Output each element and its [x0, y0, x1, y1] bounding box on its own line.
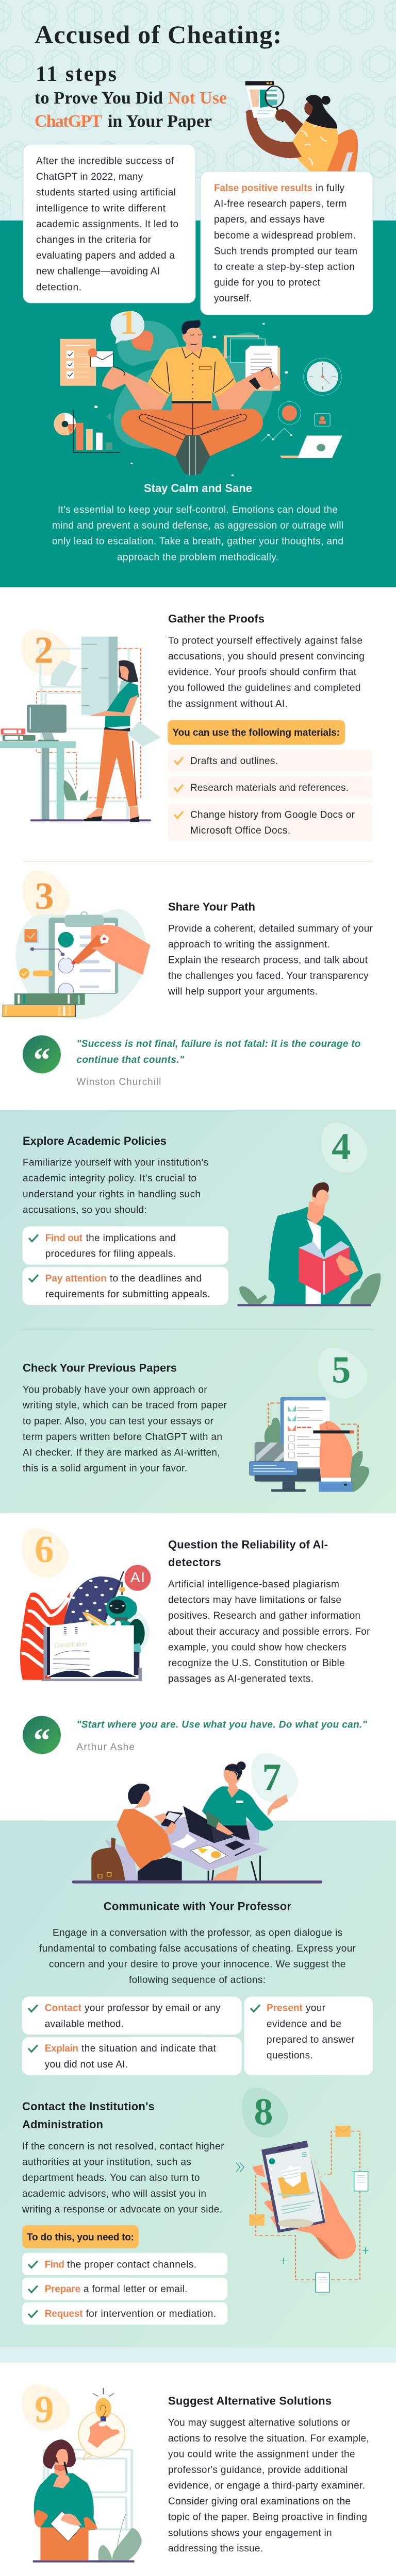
list card: prepare: [22, 2278, 227, 2300]
intro card: success of ChatGPT: ChatGPT in 2022, many: [36, 172, 143, 182]
list card: find out: [23, 1226, 228, 1265]
illustration: woman with light bulb idea: [22, 2384, 142, 2563]
book title label: Constitution: Constitution: [54, 1640, 87, 1649]
heading: explore academic policies: Explore Academic Policies: [23, 1134, 167, 1147]
text block: reliability: Artificial intelligence-based plagiarism: [168, 1579, 339, 1590]
panel: steps 7 and 8: [0, 1753, 396, 2347]
heading: question the reliability: [168, 1538, 328, 1569]
quote: Arthur Ashe: "Start where you are. Use what you have. Do what you can.": [76, 1720, 368, 1731]
list card: present: questions.: [267, 2050, 313, 2061]
intro card: false positive results: [201, 172, 373, 315]
text block: contact administration: If the concern is not resolved, contact higher: [22, 2141, 224, 2152]
text block: gather the proofs: you followed the guidelines and completed: [168, 683, 361, 693]
title: to Prove You Did: [35, 89, 163, 108]
list card: present: [244, 1996, 373, 2075]
list card: present: prepared to answer: [267, 2035, 355, 2045]
list card: present: Present: [267, 2003, 303, 2014]
list card: prepare: a formal letter or email.: [84, 2284, 187, 2295]
intro card: false positive results: yourself.: [214, 293, 252, 304]
list card: find out: Find out: [45, 1233, 83, 1244]
step number 2: 2: [34, 630, 54, 672]
intro card: false positive results: guide for you to protect: [214, 278, 321, 289]
intro card: success of ChatGPT: [23, 144, 195, 303]
text block: share your path: approach to writing the assignment.: [168, 939, 330, 950]
text block: contact administration: writing a response or advocate on your side.: [22, 2204, 222, 2215]
intro card: success of ChatGPT: intelligence to write different: [36, 203, 166, 214]
list card: find: Find: [45, 2259, 64, 2270]
list card: pay attention: requirements for submitting appeals.: [45, 1289, 210, 1300]
text block: communicate: [39, 1928, 356, 1986]
intro card: success of ChatGPT: new challenge—avoiding AI: [36, 266, 160, 277]
list item: drafts and outlines: [168, 750, 373, 772]
quote: Arthur Ashe: “: [33, 1722, 51, 1759]
illustration: hand with pencil on checklist: [3, 871, 150, 1019]
list item: change history: Change history from Google Docs or: [190, 810, 355, 821]
callout: to do this: To do this, you need to:: [27, 2232, 134, 2243]
list item: drafts and outlines: Drafts and outlines.: [190, 756, 278, 767]
intro card: false positive results: papers, and essays have: [214, 214, 325, 225]
text block: reliability: [168, 1579, 370, 1684]
quote: Arthur Ashe: Arthur Ashe: [76, 1742, 135, 1753]
text block: contact administration: [22, 2141, 224, 2215]
text block: share your path: Provide a coherent, detailed summary of your: [168, 923, 373, 934]
text block: stay calm: approach the problem methodically.: [117, 552, 278, 563]
text block: communicate: concern and your desire to prove your innocence. We suggest the: [49, 1959, 345, 1970]
title: ChatGPT: [35, 112, 102, 131]
illustration: student talking with professor, step 7: [72, 1753, 322, 1884]
step number 9: 9: [35, 2388, 54, 2431]
text block: alternative solutions: You may suggest alternative solutions or: [168, 2417, 351, 2428]
intro card: false positive results: AI-free research papers, term: [214, 199, 346, 210]
panel: step 6 reliability of AI detectors: [20, 1528, 370, 1759]
text block: alternative solutions: solutions shows your engagement in: [168, 2528, 332, 2538]
heading: contact the administration: [22, 2100, 155, 2131]
list item: research materials: [168, 776, 373, 799]
quote: Winston Churchill: Winston Churchill: [76, 1077, 161, 1088]
text block: alternative solutions: Consider giving oral examinations on the: [168, 2496, 351, 2507]
text block: reliability: about their accuracy and possible errors. For: [168, 1626, 370, 1637]
text block: alternative solutions: actions to resolve the situation. For example,: [168, 2433, 369, 2444]
list card: request: for intervention or mediation.: [86, 2309, 216, 2319]
heading: check your previous papers: Check Your Previous Papers: [23, 1361, 177, 1374]
list card: find: the proper contact channels.: [67, 2259, 196, 2270]
text block: check your previous papers: this is a solid argument in your favor.: [23, 1463, 187, 1474]
list card: pay attention: Pay attention: [45, 1274, 107, 1284]
text block: reliability: detectors may have limitations or false: [168, 1595, 341, 1605]
text block: explore academic policies: [23, 1158, 208, 1216]
text block: gather the proofs: evidence. Your proofs should confirm that: [168, 667, 357, 678]
step number 4: 4: [332, 1126, 351, 1168]
text block: gather the proofs: accusations, you should present convincing: [168, 651, 365, 662]
list card: contact: your professor by email or any: [85, 2003, 221, 2014]
list card: present: your: [306, 2003, 326, 2014]
text block: check your previous papers: term papers written before ChatGPT with an: [23, 1432, 222, 1443]
list card: explain: the situation and indicate that: [81, 2043, 217, 2054]
text block: share your path: [168, 923, 373, 997]
text block: reliability: example, you could show how checkers: [168, 1642, 346, 1653]
illustration: checklist and monitor, step 5: [250, 1348, 369, 1492]
list card: contact: Contact: [45, 2003, 82, 2014]
callout: materials: [168, 720, 345, 745]
panel: step 3 share your path: [3, 871, 373, 1088]
panel: step 2 gather the proofs: [0, 612, 373, 841]
text block: stay calm: It's essential to keep your self-control. Emotions can cloud the: [58, 505, 338, 516]
intro card: success of ChatGPT: changes in the criteria for: [36, 235, 152, 245]
text block: explore academic policies: Familiarize yourself with your institution's: [23, 1158, 208, 1168]
text block: reliability: recognize the U.S. Constitution or Bible: [168, 1658, 345, 1669]
step number 3: 3: [35, 875, 54, 918]
step number 6: 6: [35, 1529, 54, 1571]
heading: contact the administration: Administration: [22, 2118, 103, 2131]
step number 8: 8: [254, 2091, 273, 2133]
list card: find: [22, 2253, 227, 2275]
text block: communicate: Engage in a conversation with the professor, as open dialogue is: [53, 1928, 342, 1939]
text block: gather the proofs: To protect yourself effectively against false: [168, 635, 362, 646]
heading: question the reliability: Question the Reliability of AI-: [168, 1538, 328, 1551]
heading: question the reliability: detectors: [168, 1556, 221, 1569]
quote: Winston Churchill: “: [33, 1041, 51, 1079]
text block: communicate: following sequence of actions:: [129, 1975, 266, 1986]
intro card: false positive results: in fully: [316, 183, 344, 194]
panel: steps 4 and 5: [0, 1110, 396, 1513]
illustration: woman carrying stack of papers: [0, 629, 161, 822]
text block: communicate: fundamental to combating false accusations of cheating. Express your: [39, 1943, 356, 1954]
text block: gather the proofs: [168, 635, 365, 709]
text block: contact administration: academic advisors, who will assist you in: [22, 2189, 206, 2199]
callout: to do this: [22, 2225, 139, 2248]
list card: explain: Explain: [45, 2043, 78, 2054]
text block: alternative solutions: evidence, or engage a third-party examiner.: [168, 2481, 365, 2492]
illustration: man holding red book, step 4: [237, 1123, 381, 1306]
text block: check your previous papers: to paper. Also, you can test your essays or: [23, 1416, 214, 1427]
intro card: false positive results: False positive results: [214, 183, 312, 194]
callout: materials: You can use the following materials:: [172, 727, 340, 738]
text block: alternative solutions: addressing the issue.: [168, 2544, 263, 2554]
list card: request: [22, 2302, 227, 2325]
list item: change history: Microsoft Office Docs.: [190, 825, 290, 836]
text block: stay calm: only lead to escalation. Take a breath, gather your thoughts, and: [52, 536, 343, 547]
text block: explore academic policies: accusations, so you should:: [23, 1205, 147, 1216]
text block: contact administration: department heads. You can also turn to: [22, 2173, 200, 2183]
heading: communicate with your professor: Communicate with Your Professor: [104, 1900, 291, 1913]
text block: share your path: Explain the research process, and talk about: [168, 955, 368, 965]
text block: alternative solutions: you could write the assignment under the: [168, 2449, 355, 2460]
badge text: AI: AI: [130, 1569, 145, 1585]
text block: reliability: passages as AI-generated texts.: [168, 1673, 314, 1684]
illustration: woman with magnifying glass: [245, 81, 358, 171]
intro card: success of ChatGPT: academic assignments. It led to: [36, 219, 178, 230]
title: [35, 20, 282, 131]
heading: suggest alternative solutions: Suggest Alternative Solutions: [168, 2395, 332, 2407]
step number 7: 7: [262, 1756, 282, 1799]
quote: Winston Churchill: [23, 1036, 360, 1088]
text block: share your path: will help support your arguments.: [168, 987, 318, 997]
list card: explain: [22, 2037, 242, 2075]
list card: find out: the implications and: [86, 1233, 176, 1244]
intro card: success of ChatGPT: evaluating papers and added a: [36, 250, 175, 261]
intro card: success of ChatGPT: After the incredible success of: [36, 156, 174, 167]
text block: stay calm: mind and prevent a sound defense, as aggression or outrage will: [52, 520, 343, 531]
title: Not Use: [168, 89, 227, 108]
title: Accused of Cheating:: [35, 20, 282, 49]
text block: alternative solutions: topic of the paper. Being proactive in finding: [168, 2512, 367, 2523]
text block: share your path: the challenges you faced. Your transparency: [168, 971, 369, 981]
intro card: success of ChatGPT: students started using artificial: [36, 188, 176, 198]
text block: alternative solutions: professor's guidance, provide additional: [168, 2465, 348, 2476]
text block: stay calm: [52, 505, 343, 563]
illustration: meditating man, step 1: [54, 311, 342, 476]
list card: pay attention: [23, 1267, 228, 1305]
intro card: success of ChatGPT: detection.: [36, 282, 81, 293]
quote: Arthur Ashe: [23, 1716, 368, 1759]
list card: find out: procedures for filing appeals.: [45, 1249, 176, 1260]
list card: pay attention: to the deadlines and: [110, 1274, 202, 1284]
quote: Winston Churchill: continue that counts.": [76, 1055, 185, 1065]
list card: prepare: Prepare: [45, 2284, 80, 2295]
list card: contact: available method.: [45, 2019, 124, 2029]
panel: step 9 suggest alternative solutions: [22, 2384, 369, 2576]
text block: explore academic policies: academic integrity policy. It’s crucial to: [23, 1173, 196, 1184]
list item: change history: [168, 803, 373, 841]
list card: present: evidence and be: [267, 2019, 341, 2029]
text block: gather the proofs: the assignment without AI.: [168, 699, 288, 709]
step number 1: 1: [120, 302, 137, 342]
text block: check your previous papers: You probably have your own approach or: [23, 1384, 207, 1395]
title: 11 steps: [36, 62, 117, 86]
list card: contact: [22, 1996, 242, 2035]
list card: request: Request: [45, 2309, 83, 2319]
text block: contact administration: authorities at your institution, such as: [22, 2157, 191, 2168]
intro card: false positive results: Such trends prompted our team: [214, 246, 357, 257]
heading: share your path: Share Your Path: [168, 900, 255, 913]
step number 5: 5: [332, 1349, 351, 1391]
text block: check your previous papers: AI checker. If they are marked as AI-written,: [23, 1448, 220, 1459]
list item: research materials: Research materials and references.: [190, 783, 349, 793]
quote: Winston Churchill: "Success is not final, failure is not fatal: it is the courage to: [76, 1039, 360, 1049]
text block: check your previous papers: [22, 1384, 227, 1474]
text block: check your previous papers: writing style, which can be traced from paper: [22, 1400, 227, 1411]
title: in Your Paper: [108, 112, 212, 131]
panel: hero introduction: [0, 0, 396, 587]
illustration: robot, flag and constitution: [20, 1528, 151, 1680]
heading: gather the proofs: Gather the Proofs: [168, 612, 265, 625]
text block: alternative solutions: [168, 2417, 369, 2554]
list card: explain: you did not use AI.: [45, 2059, 128, 2070]
text block: explore academic policies: understand your rights in handling such: [23, 1189, 201, 1200]
text block: reliability: positives. Research and gather information: [168, 1611, 360, 1621]
intro card: false positive results: become a widespread problem.: [214, 230, 356, 241]
illustration: phone with envelope, step 8: [236, 2088, 369, 2292]
intro card: false positive results: to create a step-by-step action: [214, 262, 355, 273]
heading: contact the administration: Contact the Institution's: [22, 2100, 155, 2113]
heading: stay calm and sane: Stay Calm and Sane: [144, 482, 252, 495]
